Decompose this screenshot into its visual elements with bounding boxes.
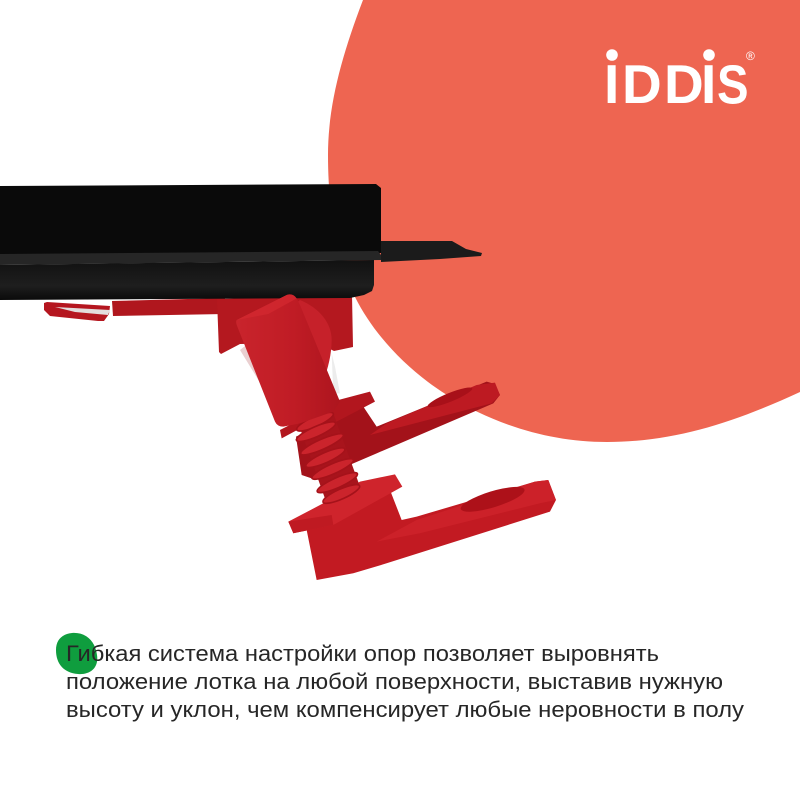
logo: iddis: S — [717, 54, 749, 115]
ball joint — [270, 300, 332, 390]
drain tray: black profile — [0, 184, 482, 300]
red bar under tray — [112, 298, 225, 316]
red bracket — [217, 295, 353, 354]
body text: Гибкая система настройки опор позволяет выровнять — [66, 641, 659, 666]
pale reflection behind joint — [240, 343, 263, 383]
body text: положение лотка на любой поверхности, выставив нужную — [66, 669, 723, 694]
body text — [66, 641, 745, 722]
logo: iddis: IDDI — [604, 53, 716, 115]
threaded screw — [294, 409, 362, 507]
red clip tab under tray — [44, 302, 110, 321]
background blob: salmon circle — [328, 0, 800, 442]
adjustable support legs — [236, 294, 556, 580]
upper cylinder — [236, 294, 340, 427]
green accent blob — [56, 633, 97, 674]
body text: высоту и уклон, чем компенсирует любые неровности в полу — [66, 697, 745, 722]
logo: iddis: ® — [746, 49, 755, 63]
upper foot — [280, 382, 500, 478]
lower foot — [288, 474, 556, 580]
logo: iddis — [604, 49, 755, 115]
